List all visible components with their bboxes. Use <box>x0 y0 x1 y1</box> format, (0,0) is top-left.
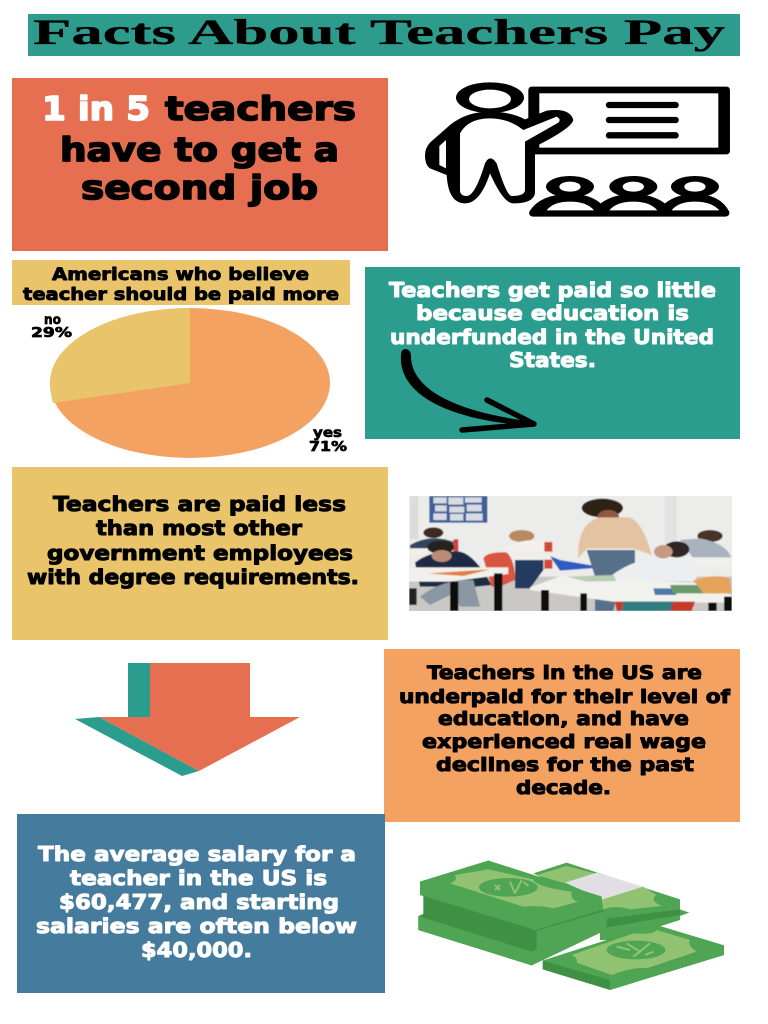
panel: underpaid for education: decade. <box>516 777 611 799</box>
panel: 1 in 5 teachers: 1 in 5 <box>42 89 150 128</box>
panel: underfunded education <box>365 267 740 439</box>
panel: average salary: $40,000. <box>141 938 252 962</box>
chart heading: teacher should be paid more <box>23 285 339 305</box>
icon: stacks of money <box>418 861 724 990</box>
panel: average salary: $60,477, and starting <box>59 890 339 914</box>
pie label: yes: yes <box>313 426 342 441</box>
panel: 1 in 5 teachers: teachers <box>165 89 356 128</box>
pie label: no: 29% <box>31 326 72 341</box>
panel: underpaid for education: Teachers in the US are <box>427 662 702 684</box>
panel: 1 in 5 teachers: second job <box>81 168 318 207</box>
pie chart <box>31 308 347 458</box>
panel: average salary: salaries are often below <box>36 914 357 938</box>
panel: underpaid for education: declines for the past <box>436 754 694 776</box>
panel: underpaid for education <box>384 649 740 822</box>
panel: 1 in 5 teachers: have to get a <box>60 130 339 169</box>
chart heading <box>12 260 350 305</box>
icon: teacher at board with students <box>425 82 730 217</box>
panel: government employees: with degree requirements. <box>27 565 359 589</box>
panel: average salary <box>17 814 385 993</box>
panel: government employees <box>12 467 388 640</box>
panel: average salary: teacher in the US is <box>70 866 327 890</box>
pie label: no <box>31 313 72 341</box>
title banner: Facts About Teachers Pay <box>33 12 725 52</box>
panel: underfunded education: underfunded in the United <box>390 325 714 349</box>
photo: teacher in classroom <box>400 480 750 630</box>
panel: underpaid for education: experienced real wage <box>422 731 706 753</box>
panel: underpaid for education: education, and have <box>438 708 689 730</box>
panel: underfunded education: because education is <box>416 301 689 325</box>
panel: government employees: Teachers are paid less <box>53 492 346 516</box>
panel: underfunded education: Teachers get paid so little <box>389 278 716 302</box>
arrow: curved black <box>401 349 535 430</box>
pie label: yes: 71% <box>309 440 347 455</box>
panel: 1 in 5 teachers <box>12 78 388 251</box>
icon: down arrow <box>75 663 300 776</box>
pie label: yes <box>309 426 347 455</box>
panel: average salary: The average salary for a <box>38 842 356 866</box>
panel: government employees: than most other <box>96 516 302 540</box>
panel: underfunded education: States. <box>509 348 596 372</box>
panel: underpaid for education: underpaid for their level of <box>399 686 731 708</box>
chart heading: Americans who believe <box>52 265 309 285</box>
pie label: no: no <box>44 313 61 328</box>
panel: government employees: government employees <box>47 541 353 565</box>
title banner <box>28 12 740 56</box>
